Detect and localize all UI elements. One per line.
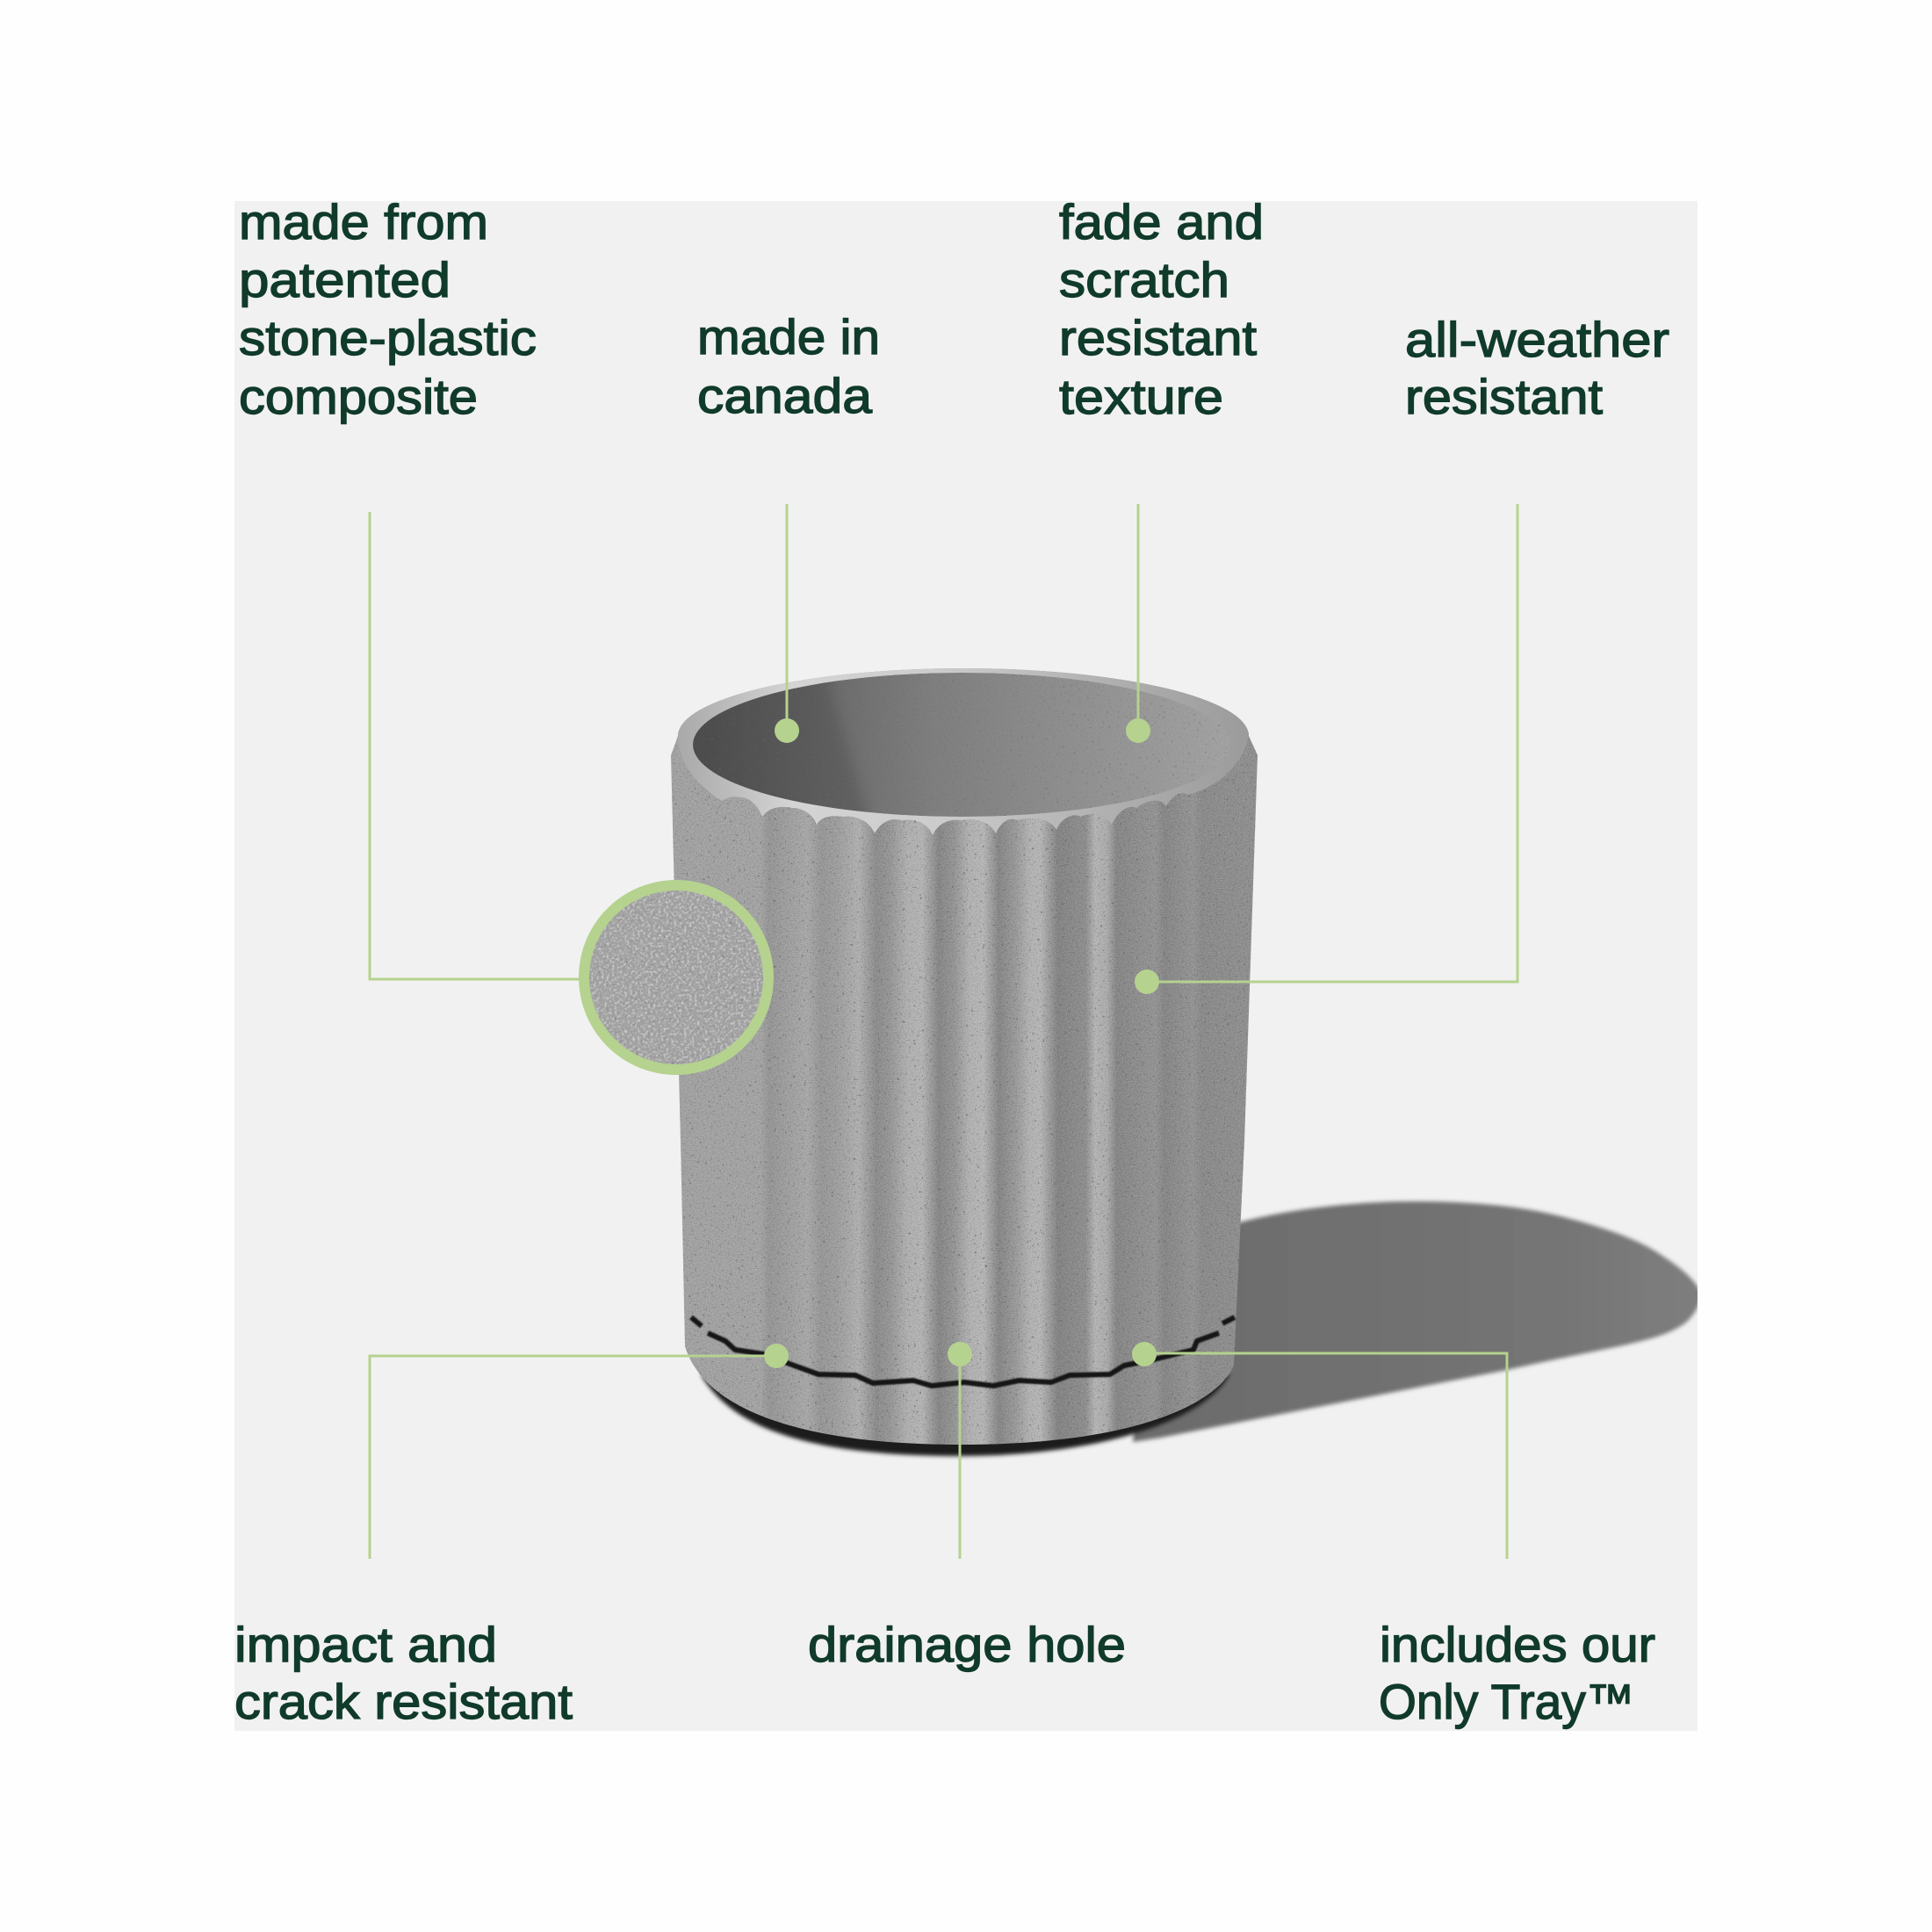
label: made in canada: made in	[697, 309, 880, 364]
label: all-weather resistant	[1405, 312, 1669, 424]
swatch texture	[589, 890, 763, 1064]
label: fade and scratch resistant texture	[1059, 194, 1264, 424]
planter rim with scalloped edge	[678, 668, 1249, 835]
planter interior	[693, 673, 1228, 817]
label: made in canada: canada	[697, 368, 873, 423]
label: all-weather resistant: all-weather	[1405, 312, 1669, 367]
label: made from patented stone-plastic composite: made from	[239, 194, 488, 249]
planter body with flutes	[659, 659, 1273, 1458]
callout: fade and scratch leader	[1126, 504, 1150, 743]
callout: made in canada leader	[775, 504, 799, 743]
label: impact and crack resistant: impact and	[234, 1617, 497, 1672]
label: fade and scratch resistant texture: texture	[1059, 369, 1223, 424]
callout: all-weather leader	[1135, 504, 1517, 994]
callout: tray leader	[1132, 1342, 1507, 1559]
swatch ring	[584, 885, 768, 1070]
callout: drainage hole leader	[948, 1342, 972, 1559]
callout: impact leader	[370, 1344, 789, 1559]
label: fade and scratch resistant texture: fade and	[1059, 194, 1264, 249]
panel: light grey background	[234, 201, 1698, 1731]
fluted planter	[659, 659, 1273, 1458]
dark contact shadow under planter	[701, 1374, 1229, 1456]
label: drainage hole: drainage hole	[808, 1617, 1126, 1672]
label: all-weather resistant: resistant	[1405, 369, 1603, 424]
label: made in canada	[697, 309, 880, 423]
label: fade and scratch resistant texture: scratch	[1059, 252, 1229, 307]
callout: texture swatch	[584, 885, 768, 1070]
label: includes our Only Tray: Only Tray™	[1379, 1674, 1634, 1729]
planter cast shadow	[1133, 1201, 1700, 1442]
label: includes our Only Tray: includes our	[1380, 1617, 1655, 1672]
tray seam line	[691, 1317, 1235, 1386]
label: impact and crack resistant	[234, 1617, 573, 1729]
label: made from patented stone-plastic composite: composite	[239, 369, 478, 424]
label: includes our Only Tray	[1379, 1617, 1655, 1729]
callout: stone-plastic composite leader	[370, 512, 581, 979]
label: impact and crack resistant: crack resistant	[234, 1674, 573, 1729]
label: made from patented stone-plastic composite: patented	[239, 252, 451, 307]
label: made from patented stone-plastic composite: stone-plastic	[239, 310, 537, 365]
label: made from patented stone-plastic composite	[239, 194, 537, 424]
label: fade and scratch resistant texture: resistant	[1059, 310, 1257, 365]
